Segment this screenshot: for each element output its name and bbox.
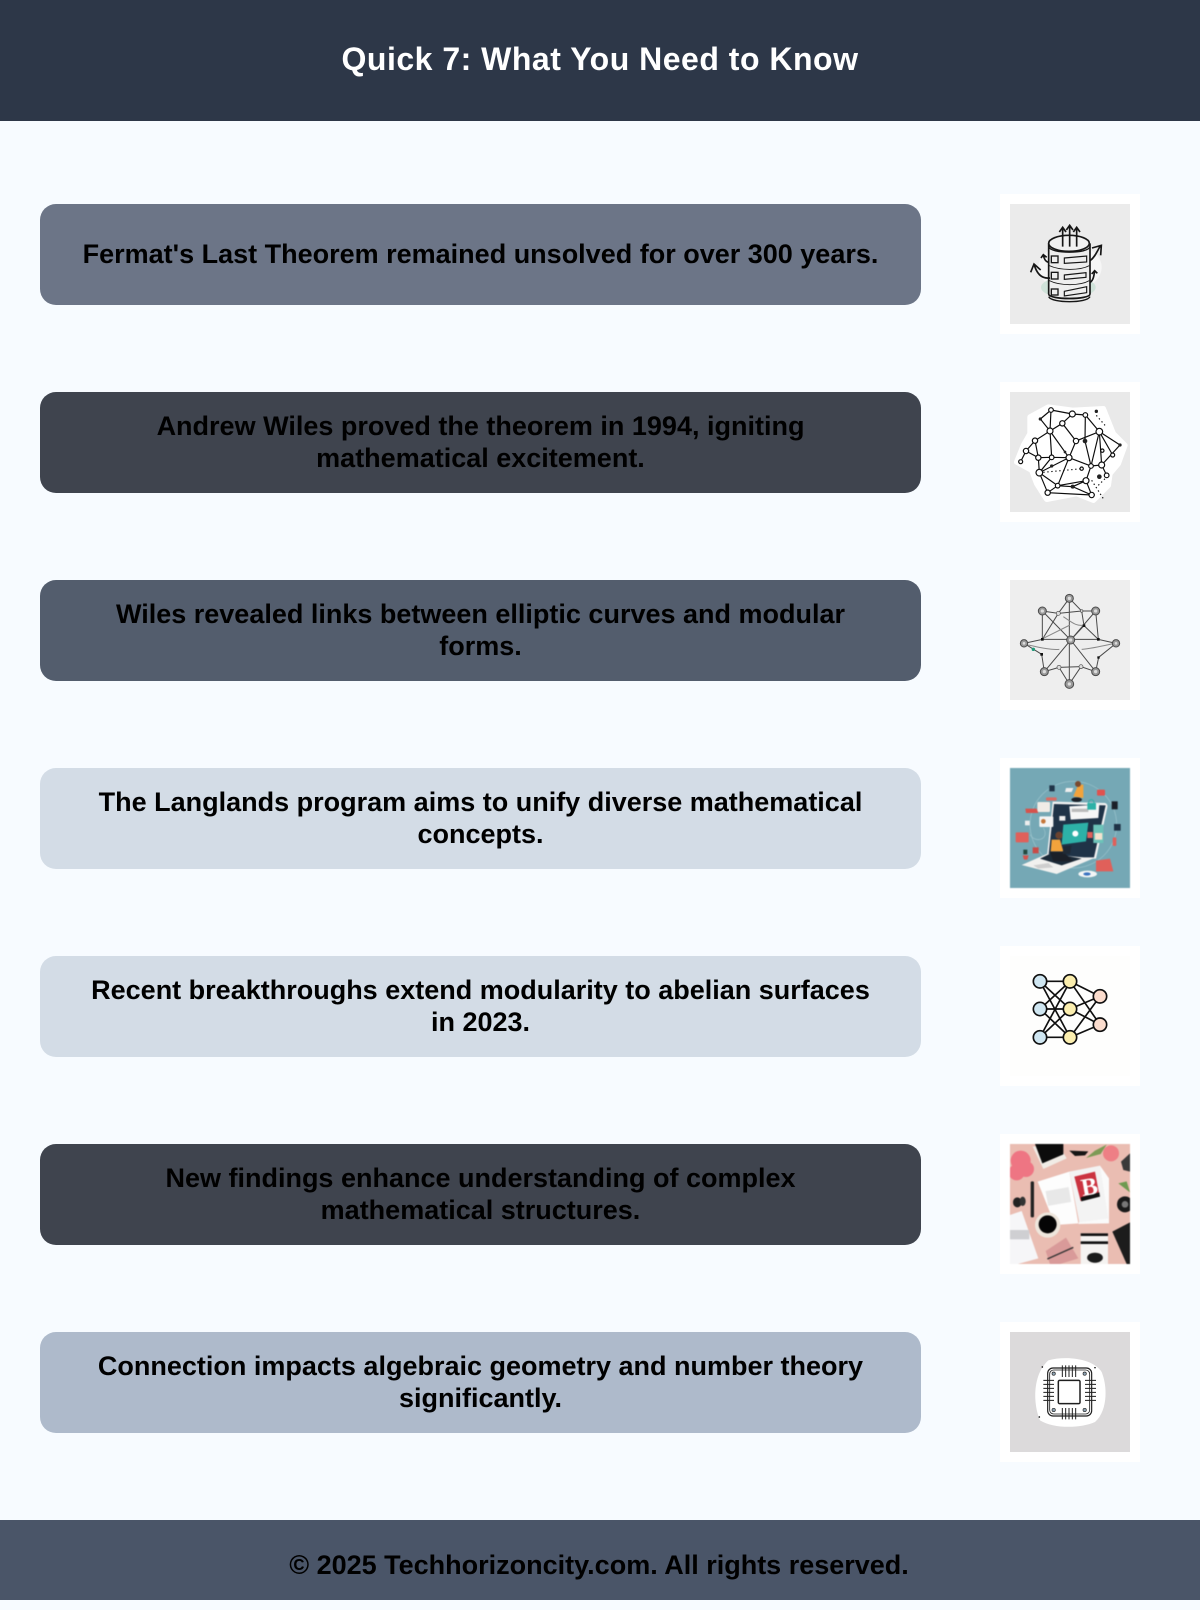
icon: symmetric graph [1000,570,1140,710]
card 2: Andrew Wiles: mathematical excitement. [316,442,645,472]
card 5: abelian surfaces [40,956,921,1057]
card 1: Fermat's Last Theorem [40,204,921,305]
icon: neural network [1000,946,1140,1086]
card 7: algebraic geometry [40,1332,921,1433]
header: title [0,0,1200,121]
header: title: Quick 7: What You Need to Know [342,41,858,77]
card 5: abelian surfaces: Recent breakthroughs extend modularity to abelian surfaces [91,974,870,1004]
icon: database cylinder with arrows [1000,194,1140,334]
card 6: complex structures: mathematical structures. [321,1194,640,1224]
icon: laptop illustration [1000,758,1140,898]
card 3: elliptic curves [40,580,921,681]
icon: microchip [1000,1322,1140,1462]
card 6: complex structures [40,1144,921,1245]
card 1: Fermat's Last Theorem: Fermat's Last Theorem remained unsolved for over 300 years. [83,238,878,268]
footer: copyright [0,1520,1200,1600]
icon: flat lay of magazine and coffee [1000,1134,1140,1274]
footer: copyright: © 2025 Techhorizoncity.com. All rights reserved. [289,1550,909,1580]
card 7: algebraic geometry: significantly. [399,1382,562,1412]
card 2: Andrew Wiles [40,392,921,493]
card 2: Andrew Wiles: Andrew Wiles proved the theorem in 1994, igniting [157,410,804,440]
icon: flat lay of magazine and coffee: B [1079,1173,1100,1202]
card 4: Langlands program: concepts. [417,818,544,848]
card 4: Langlands program: The Langlands program aims to unify diverse mathematical [99,786,862,816]
card 3: elliptic curves: Wiles revealed links between elliptic curves and modular [116,598,845,628]
card 5: abelian surfaces: in 2023. [431,1006,530,1036]
card 6: complex structures: New findings enhance understanding of complex [165,1162,796,1192]
icon: network sticker [1000,382,1140,522]
card 3: elliptic curves: forms. [439,630,522,660]
card 7: algebraic geometry: Connection impacts algebraic geometry and number theory [98,1350,863,1380]
card 4: Langlands program [40,768,921,869]
